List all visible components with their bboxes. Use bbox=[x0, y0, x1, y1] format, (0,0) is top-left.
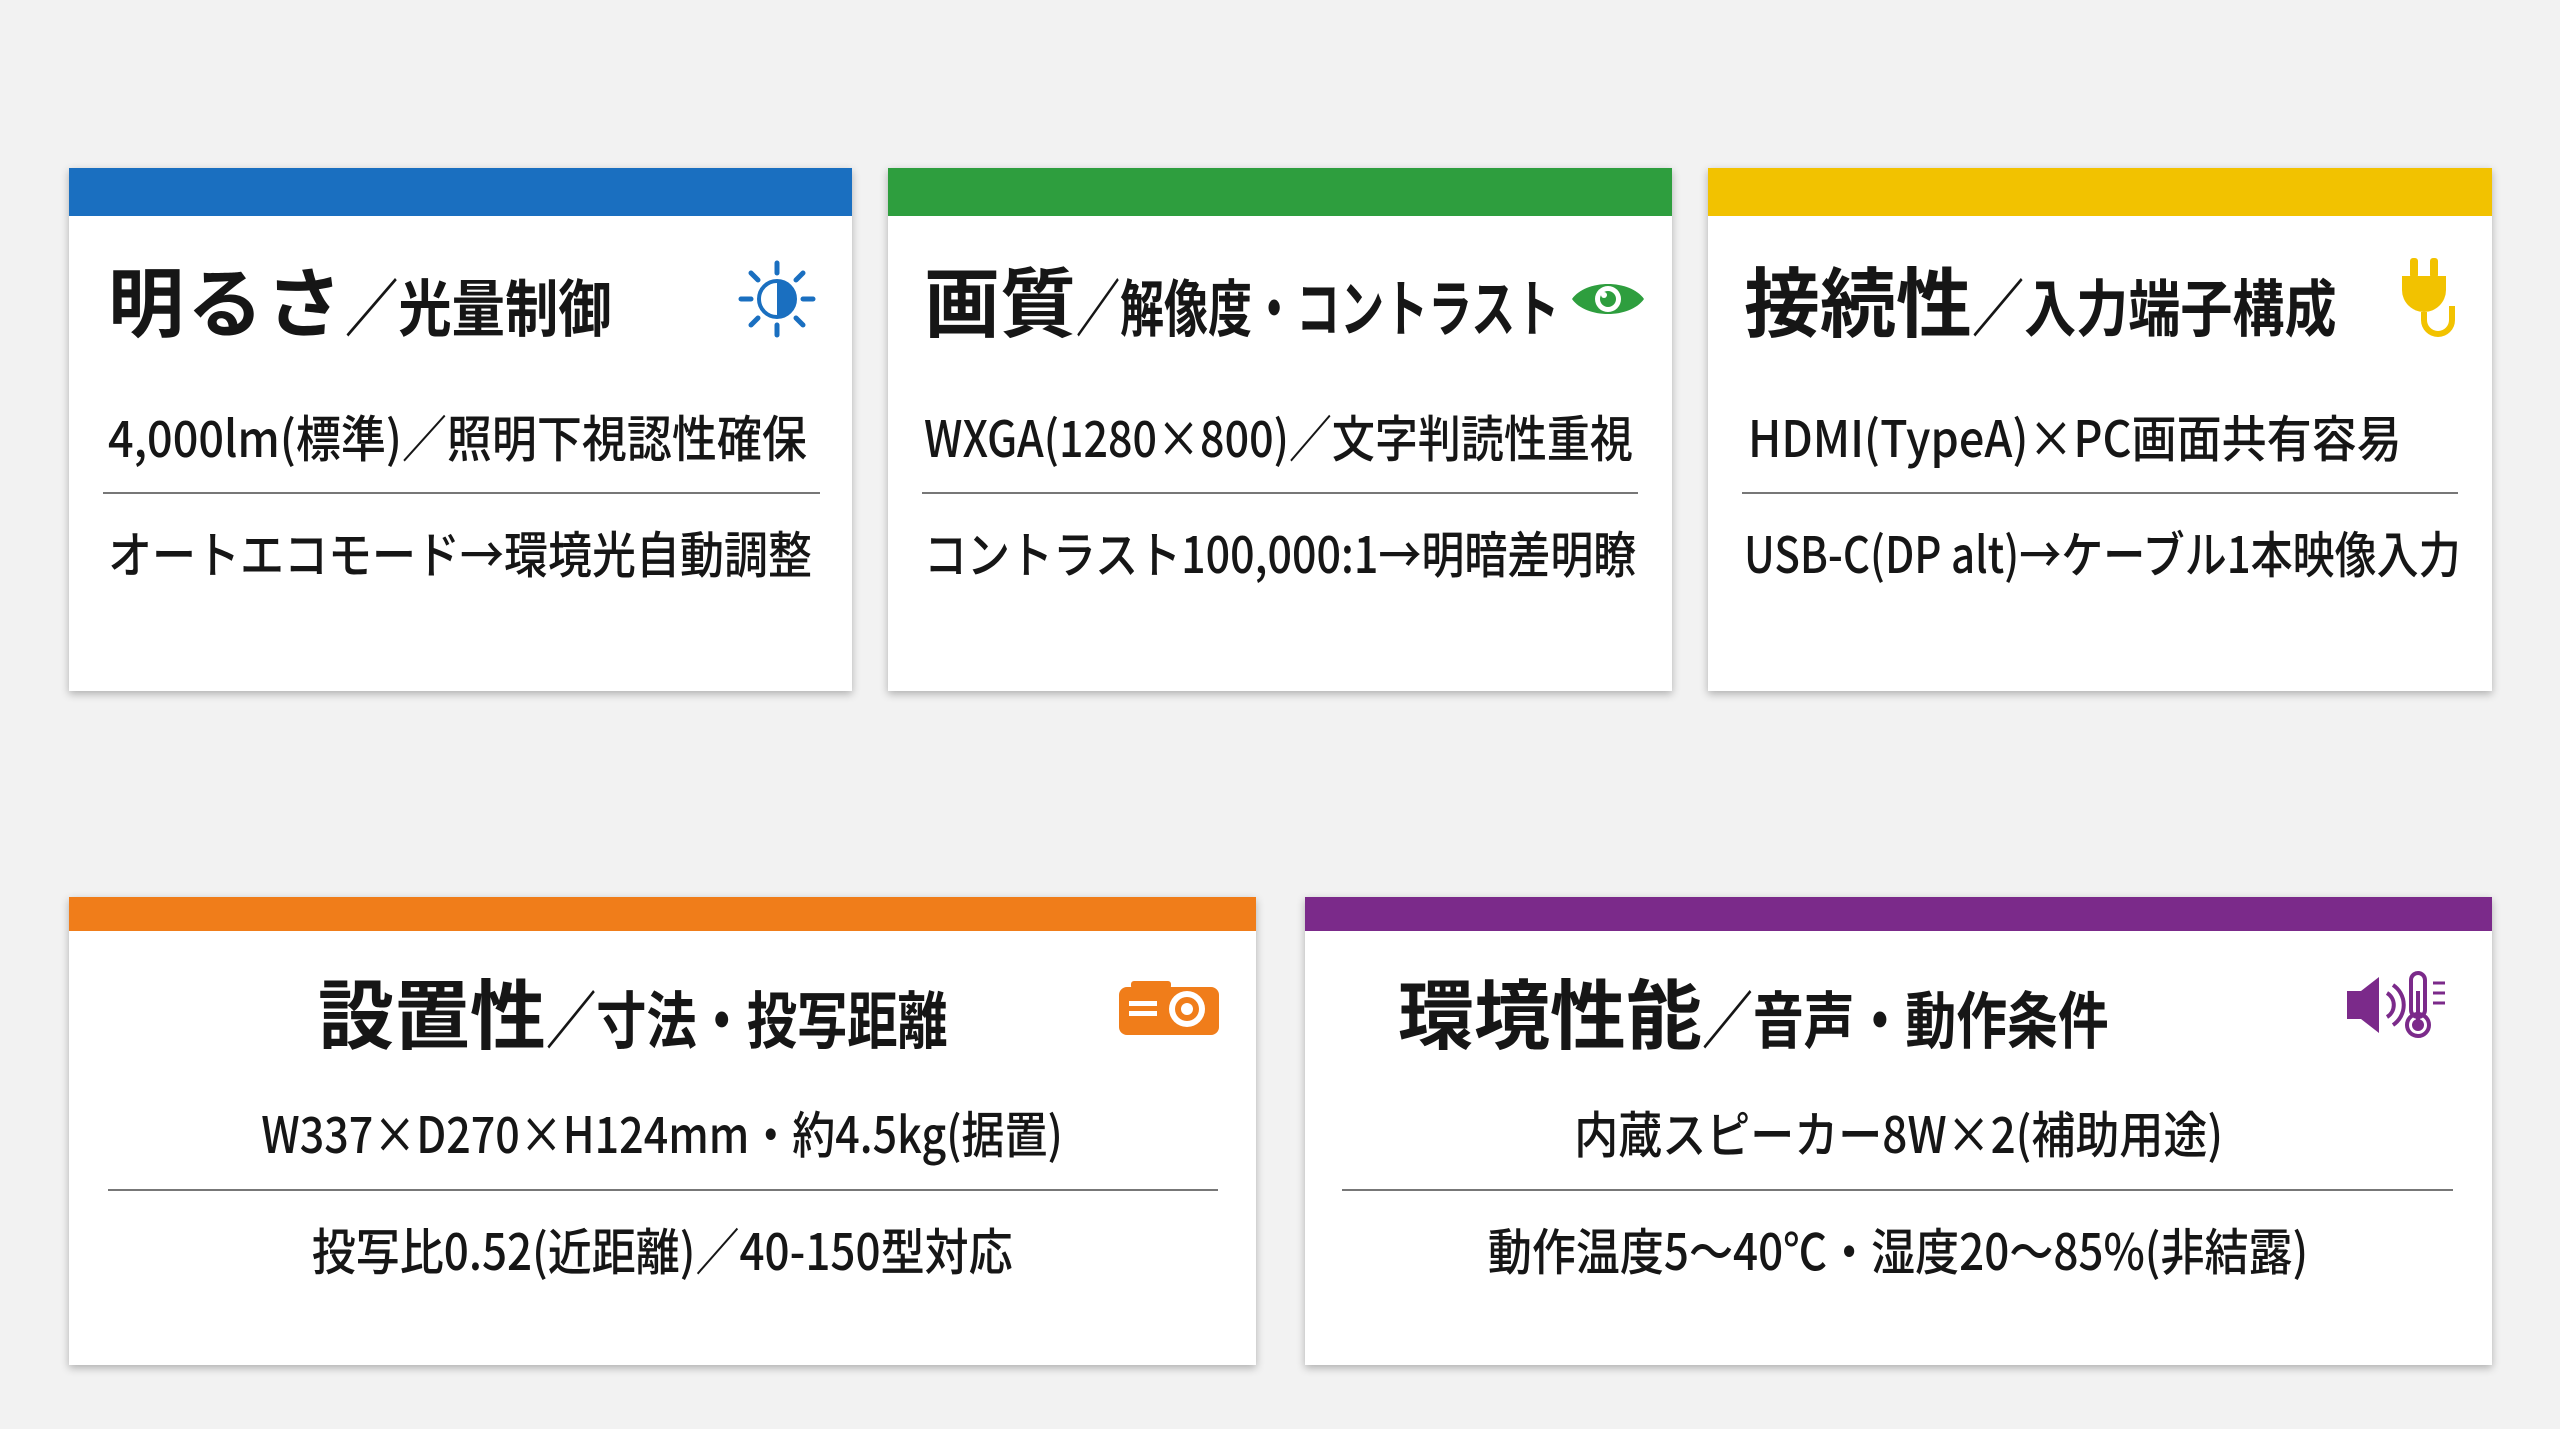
heading: brightness: 明るさ bbox=[108, 243, 345, 353]
icon: speaker and thermometer bbox=[2347, 971, 2445, 1038]
icon: plug bbox=[2402, 258, 2455, 337]
text: line 2: USB-C(DP alt)→ケーブル1本映像入力 bbox=[1744, 516, 2461, 588]
heading: image quality bbox=[924, 243, 1559, 353]
heading: connectivity bbox=[1744, 243, 2337, 353]
icon: projector bbox=[1119, 981, 1219, 1035]
heading: installation: ／寸法・投写距離 bbox=[546, 971, 948, 1061]
heading: installation bbox=[318, 955, 948, 1065]
text: line 1: 4,000lm(標準)／照明下視認性確保 bbox=[108, 400, 807, 472]
heading: environment: 環境性能 bbox=[1398, 955, 1702, 1065]
panel: connectivity bbox=[1708, 168, 2492, 691]
icon: eye bbox=[1572, 284, 1644, 314]
text: line 2: オートエコモード→環境光自動調整 bbox=[108, 516, 812, 588]
text: line 1: W337×D270×H124mm・約4.5kg(据置) bbox=[262, 1096, 1063, 1168]
icon: sun bbox=[738, 260, 816, 338]
heading: environment bbox=[1398, 955, 2109, 1065]
heading: image quality: ／解像度・コントラスト bbox=[1076, 259, 1559, 349]
heading: connectivity: 接続性 bbox=[1744, 243, 1972, 353]
text: line 1: HDMI(TypeA)×PC画面共有容易 bbox=[1748, 400, 2402, 472]
text: line 2: 投写比0.52(近距離)／40-150型対応 bbox=[312, 1213, 1013, 1285]
heading: connectivity: ／入力端子構成 bbox=[1972, 259, 2337, 349]
text: line 2: コントラスト100,000:1→明暗差明瞭 bbox=[924, 516, 1636, 588]
heading: brightness: ／光量制御 bbox=[345, 259, 612, 349]
heading: environment: ／音声・動作条件 bbox=[1702, 971, 2109, 1061]
text: line 1: WXGA(1280×800)／文字判読性重視 bbox=[924, 400, 1633, 472]
text: line 1: 内蔵スピーカー8W×2(補助用途) bbox=[1574, 1096, 2223, 1168]
heading: installation: 設置性 bbox=[318, 955, 546, 1065]
panel: installation bbox=[69, 897, 1256, 1365]
text: line 2: 動作温度5～40℃・湿度20～85%(非結露) bbox=[1488, 1213, 2309, 1285]
panel: environment bbox=[1305, 897, 2492, 1365]
heading: image quality: 画質 bbox=[924, 243, 1076, 353]
panel: image quality bbox=[888, 168, 1672, 691]
heading: brightness bbox=[108, 243, 612, 353]
panel: brightness bbox=[69, 168, 852, 691]
